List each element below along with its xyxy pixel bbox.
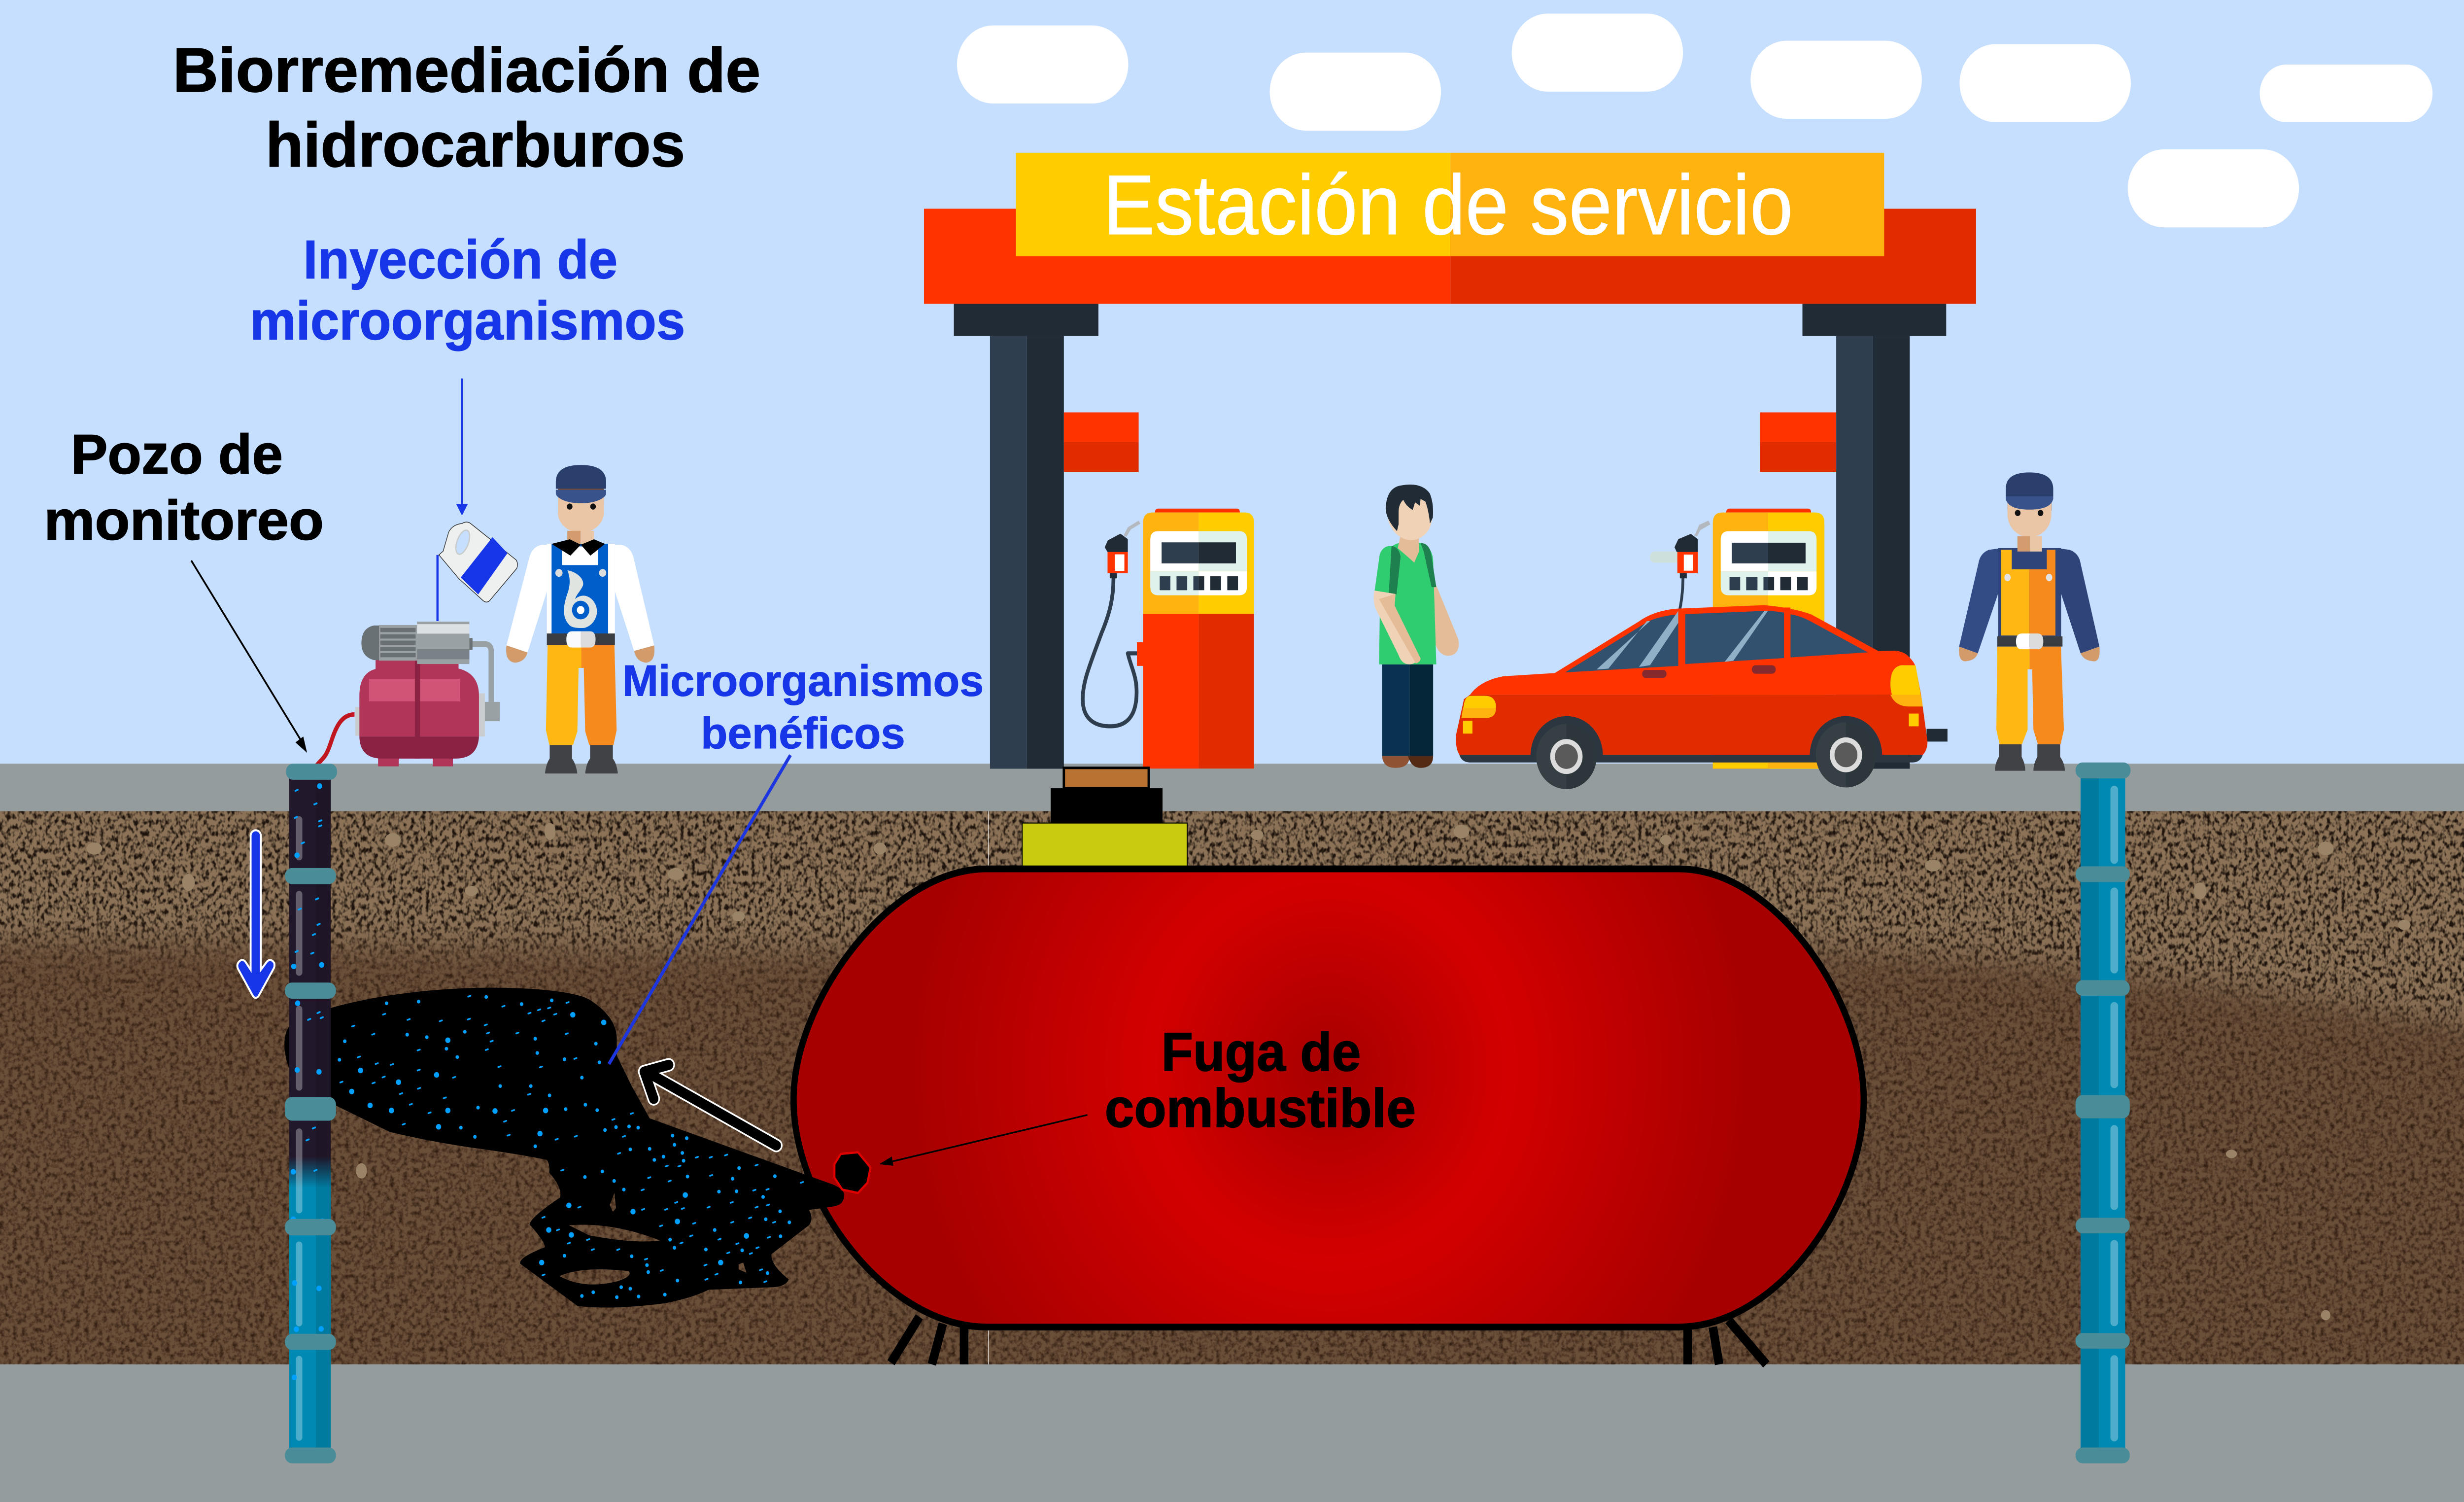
logo on bib bbox=[564, 570, 597, 628]
clouds bbox=[957, 14, 2432, 227]
red car bbox=[1456, 605, 1948, 789]
injection arrow bbox=[456, 379, 468, 516]
label: Microorganismos benéficos: Microorganismos bbox=[622, 657, 984, 705]
soil layers bbox=[0, 811, 2464, 1364]
left well couplers bbox=[285, 764, 337, 1464]
tank supports bbox=[891, 1317, 1766, 1364]
label: Fuga de combustible: Fuga de bbox=[1162, 1022, 1361, 1083]
car windows bbox=[1565, 607, 1868, 672]
label: Microorganismos benéficos bbox=[622, 657, 984, 758]
label: Fuga de combustible: combustible bbox=[1105, 1078, 1416, 1139]
label: Inyección de microorganismos: microorganismos bbox=[250, 291, 685, 351]
rear wheel bbox=[1810, 716, 1882, 787]
left fuel pump bbox=[1083, 509, 1254, 768]
brown manhole cover bbox=[1064, 768, 1149, 788]
label: Microorganismos benéficos: benéficos bbox=[701, 709, 905, 758]
label: Inyección de microorganismos bbox=[250, 230, 685, 351]
label: Pozo de monitoreo bbox=[44, 423, 324, 552]
right column bbox=[1760, 304, 1946, 768]
title: Estación de servicio: Estación de servicio bbox=[1103, 158, 1793, 252]
arrow: leak direction bbox=[644, 1065, 776, 1146]
leak hole in tank bbox=[834, 1152, 871, 1193]
canopy: service station roof bbox=[924, 153, 1976, 304]
left column bbox=[954, 304, 1139, 768]
microorganisms in plume bbox=[340, 996, 803, 1297]
leader line: microorganisms bbox=[609, 755, 790, 1064]
leaked hydrocarbon plume bbox=[284, 988, 844, 1307]
right fuel pump bbox=[1650, 509, 1824, 768]
person in green shirt bbox=[1374, 485, 1459, 768]
right monitoring well bbox=[2076, 763, 2130, 1464]
jug of microorganisms bbox=[438, 522, 517, 621]
right nozzle bbox=[1650, 521, 1711, 609]
stones in the soil bbox=[86, 823, 2411, 1320]
left monitoring well bbox=[285, 764, 337, 1464]
lower concrete layer bbox=[0, 1364, 2464, 1502]
label: Pozo de monitoreo: Pozo de bbox=[70, 423, 283, 486]
leak label arrow bbox=[879, 1115, 1088, 1166]
down arrow in well bbox=[238, 830, 274, 998]
pavement surface bbox=[0, 764, 2464, 811]
heading: Biorremediación de hidrocarburos: Biorremediación de bbox=[173, 35, 760, 105]
underground fuel tank bbox=[793, 869, 1864, 1327]
label: Inyección de microorganismos: Inyección de bbox=[303, 230, 617, 290]
black tank neck bbox=[1051, 788, 1163, 824]
compressor bbox=[317, 622, 500, 767]
worker in orange overalls bbox=[1959, 472, 2100, 771]
label: Fuga de combustible bbox=[1105, 1022, 1416, 1139]
arrow: to monitoring well bbox=[191, 560, 307, 753]
front wheel bbox=[1531, 716, 1603, 789]
worker with blue bib bbox=[506, 465, 654, 773]
heading: Biorremediación de hidrocarburos bbox=[173, 35, 760, 180]
heading: Biorremediación de hidrocarburos: hidrocarburos bbox=[266, 110, 685, 180]
label: Pozo de monitoreo: monitoreo bbox=[44, 489, 324, 552]
microorganisms in well bbox=[293, 786, 323, 1377]
tank filler collar bbox=[1022, 823, 1187, 870]
hose and nozzle bbox=[1083, 521, 1140, 726]
right well couplers bbox=[2076, 763, 2130, 1464]
